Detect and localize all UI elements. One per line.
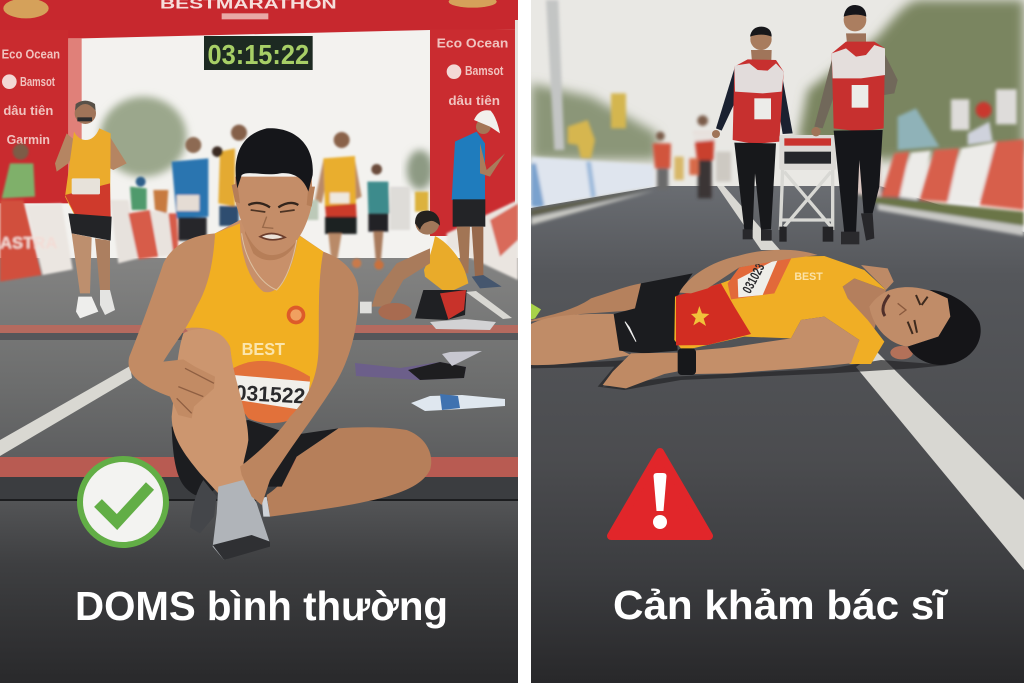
finish arch: Bamsot	[20, 75, 56, 89]
vest	[185, 223, 323, 420]
shoes	[190, 480, 270, 560]
road surface	[0, 258, 518, 683]
bib: BEST	[794, 271, 823, 283]
race bib	[233, 361, 310, 423]
right barrier	[447, 200, 518, 280]
right caption: Cản khảm bác sĩ	[613, 582, 949, 628]
icon: green check mark	[80, 459, 166, 545]
left barriers: ASTRA	[0, 233, 57, 252]
near leg	[531, 314, 631, 365]
teal runner and crowd	[305, 164, 428, 270]
flag on vest	[676, 283, 751, 345]
seated runner in background	[360, 211, 468, 320]
panel: left photo, normal DOMS	[0, 0, 518, 683]
bib	[728, 257, 823, 299]
watch	[678, 348, 696, 375]
background scene: trees, barriers, road	[531, 0, 1024, 207]
runner right of centre	[315, 132, 362, 268]
panel: right photo, see a doctor	[531, 0, 1024, 683]
arm holding shin	[129, 233, 215, 418]
finish arch: Bamsot	[465, 64, 504, 78]
roadside barriers and verge	[531, 139, 1024, 236]
finish arch	[0, 0, 518, 237]
shorts	[172, 420, 338, 497]
road markings	[0, 291, 518, 501]
left barriers	[0, 200, 178, 282]
collapsed runner lying on road	[531, 250, 981, 390]
raised leg	[172, 329, 257, 493]
finish arch: Garmin	[7, 133, 50, 147]
chest skin	[843, 278, 886, 340]
background scene: finish line	[0, 0, 518, 340]
scattered clothes on road	[355, 319, 505, 411]
finish arch: dâu tiên	[3, 104, 53, 118]
medic right	[811, 5, 898, 244]
green-vest spectator	[2, 144, 35, 198]
neck and head	[232, 128, 315, 290]
fingers on shin	[177, 368, 214, 413]
green shoe	[531, 303, 541, 319]
mid runners	[130, 125, 247, 241]
medic left	[712, 27, 793, 241]
stretcher cart	[779, 135, 836, 242]
shorts	[614, 273, 693, 353]
vest	[674, 256, 886, 364]
barriers and distant runners	[0, 125, 518, 282]
finish arch: Eco Ocean	[2, 47, 60, 61]
finish arch: dâu tiên	[448, 94, 500, 108]
far leg	[267, 427, 431, 517]
man in blue shirt with white cap	[452, 110, 505, 288]
white lane line near runner	[856, 352, 1024, 570]
background runner with sunglasses	[55, 101, 127, 318]
face	[869, 287, 952, 347]
torso skin	[185, 220, 323, 387]
arm reaching ankle	[240, 252, 358, 505]
finish arch: Eco Ocean	[437, 37, 508, 51]
road surface	[531, 186, 1024, 683]
medics and stretcher cart	[712, 5, 898, 244]
ear	[890, 346, 913, 359]
road centre line	[717, 186, 780, 250]
race bib: 031522	[234, 381, 306, 408]
vest logos	[242, 306, 305, 359]
shoulder far side	[861, 265, 894, 290]
distant runners	[653, 115, 731, 198]
vest logos: BEST	[242, 339, 285, 359]
bib: 031023	[739, 261, 768, 296]
icon: red warning triangle	[611, 452, 709, 536]
runner sitting, holding shin	[129, 128, 431, 560]
far leg	[531, 283, 641, 322]
arm on chest	[679, 250, 818, 293]
hair	[908, 290, 981, 365]
left caption: DOMS bình thường	[75, 583, 448, 629]
hand	[603, 353, 682, 388]
front arm	[678, 317, 859, 374]
shadow	[531, 360, 948, 390]
finish clock: 03:15:22	[207, 39, 309, 70]
